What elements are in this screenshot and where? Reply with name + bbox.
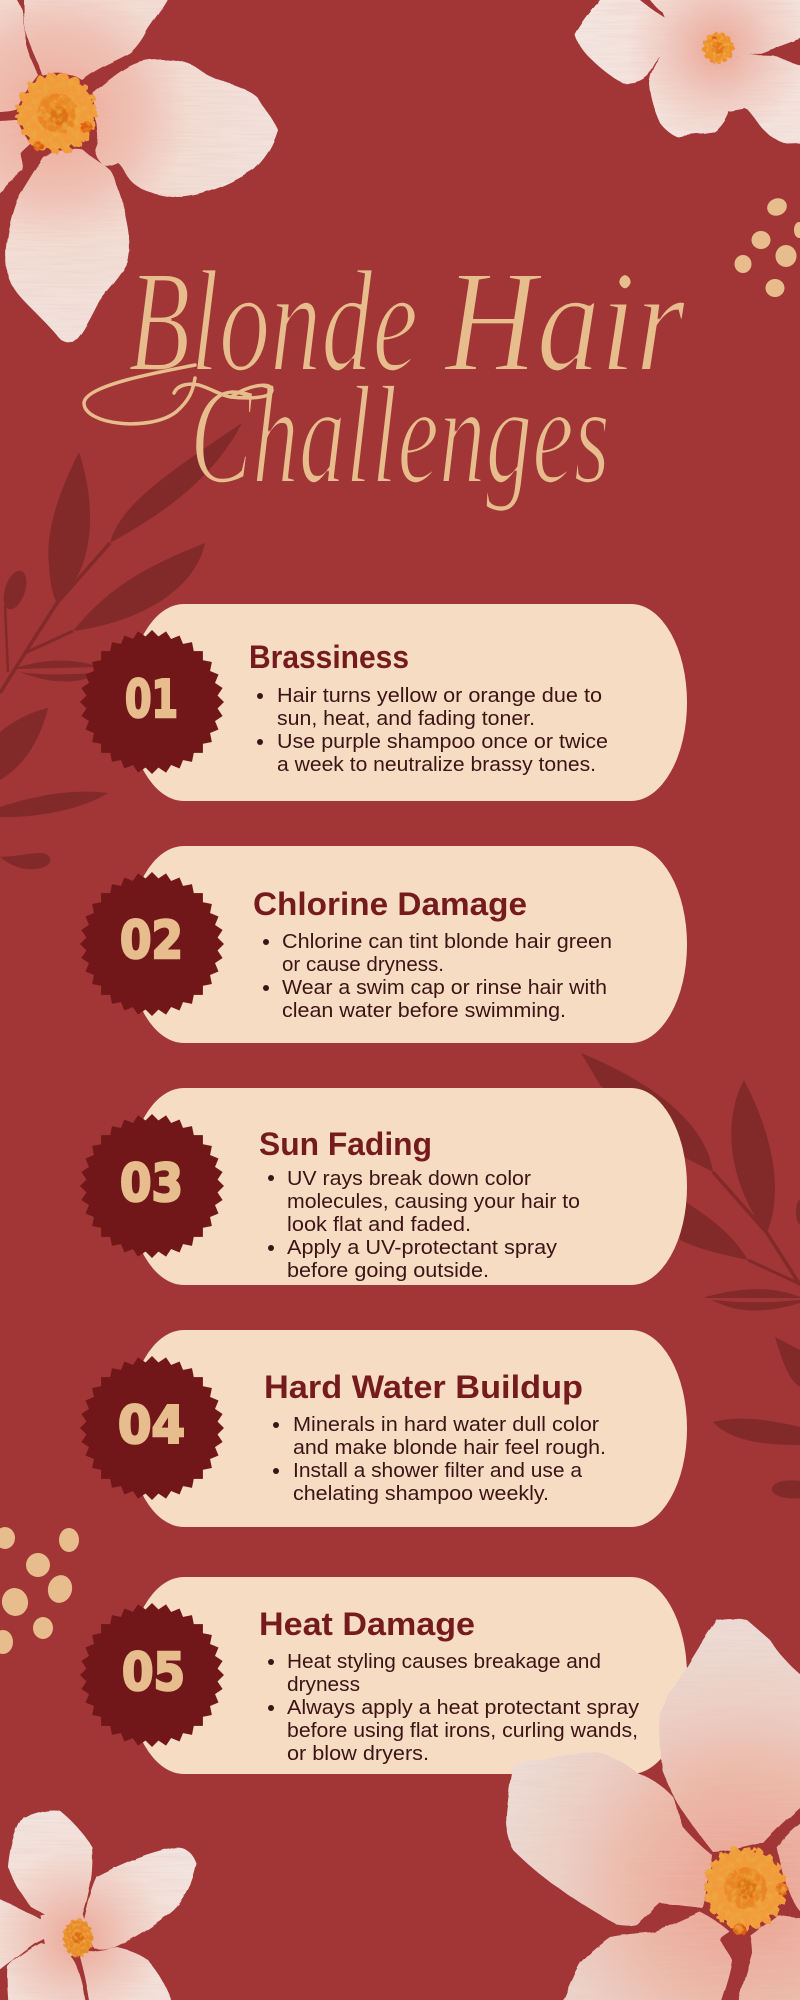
- number 04: 04: [118, 1396, 185, 1456]
- number 03: 03: [120, 1154, 183, 1214]
- bullet list: [257, 685, 608, 776]
- panel: card 3 Sun Fading: [80, 1088, 687, 1285]
- card background: [128, 604, 687, 801]
- right leaf branch: [581, 1053, 800, 1498]
- bullet list: Use purple shampoo once or twice: [277, 731, 608, 753]
- flower centre: [707, 1850, 788, 1935]
- flower top left: [0, 0, 278, 343]
- left leaf branch: [0, 423, 242, 869]
- flower centre: [20, 76, 94, 151]
- title text: Blonde: [128, 242, 418, 402]
- bullet list: and make blonde hair feel rough.: [293, 1437, 606, 1459]
- bullet list: molecules, causing your hair to: [287, 1191, 580, 1213]
- heading: Hard Water Buildup: [264, 1369, 583, 1405]
- card background: [128, 1088, 687, 1285]
- card background: [128, 1577, 687, 1774]
- number 02: 02: [120, 911, 183, 971]
- bullet list: look flat and faded.: [287, 1214, 471, 1236]
- bullet list: a week to neutralize brassy tones.: [277, 754, 596, 776]
- bullet list: [268, 1651, 639, 1765]
- number 01: 01: [125, 670, 178, 730]
- panel: card 4 Hard Water Buildup: [80, 1330, 687, 1527]
- bullet list: Always apply a heat protectant spray: [287, 1697, 639, 1719]
- card background: [128, 846, 687, 1043]
- number badge 02: [80, 872, 224, 1016]
- flower bottom left: [0, 1809, 196, 2000]
- title flourish: [84, 365, 272, 424]
- bullet list: dryness: [287, 1674, 360, 1696]
- heading: Brassiness: [249, 639, 409, 675]
- card background: [128, 1330, 687, 1527]
- number badge 05: [80, 1603, 224, 1747]
- title text: Hair: [443, 242, 685, 402]
- title text: [128, 242, 685, 513]
- flower centre: [64, 1920, 92, 1956]
- bullet list: UV rays break down color: [287, 1168, 531, 1190]
- bullet list: Chlorine can tint blonde hair green: [282, 931, 612, 953]
- panel: card 5 Heat Damage: [80, 1577, 687, 1774]
- bullet list: or cause dryness.: [282, 954, 444, 976]
- title: [84, 242, 685, 513]
- bullet list: sun, heat, and fading toner.: [277, 708, 535, 730]
- number badge 04: [80, 1356, 224, 1500]
- bullet list: Install a shower filter and use a: [293, 1460, 583, 1482]
- bullet list: [263, 931, 612, 1022]
- flower centre: [704, 34, 732, 62]
- bullet list: Wear a swim cap or rinse hair with: [282, 977, 607, 999]
- dots bottom left: [0, 1527, 79, 1654]
- heading: Chlorine Damage: [253, 886, 527, 922]
- heading: Heat Damage: [259, 1606, 475, 1642]
- number badge 01: [80, 630, 224, 774]
- bullet list: [268, 1168, 580, 1282]
- bullet list: Apply a UV-protectant spray: [287, 1237, 557, 1259]
- number badge 03: [80, 1114, 224, 1258]
- flower bottom right: [506, 1618, 800, 2000]
- bullet list: Heat styling causes breakage and: [287, 1651, 601, 1673]
- bullet list: before going outside.: [287, 1260, 489, 1282]
- bullet list: [273, 1414, 606, 1505]
- bullet list: or blow dryers.: [287, 1743, 429, 1765]
- bullet list: clean water before swimming.: [282, 1000, 566, 1022]
- dots top right: [734, 196, 800, 297]
- panel: card 2 Chlorine Damage: [80, 846, 687, 1043]
- bullet list: before using flat irons, curling wands,: [287, 1720, 638, 1742]
- panel: card 1 Brassiness: [80, 604, 687, 801]
- bullet list: chelating shampoo weekly.: [293, 1483, 549, 1505]
- flower top right: [575, 0, 800, 144]
- bullet list: Hair turns yellow or orange due to: [277, 685, 602, 707]
- bullet list: Minerals in hard water dull color: [293, 1414, 599, 1436]
- number 05: 05: [122, 1643, 185, 1703]
- heading: Sun Fading: [259, 1126, 432, 1162]
